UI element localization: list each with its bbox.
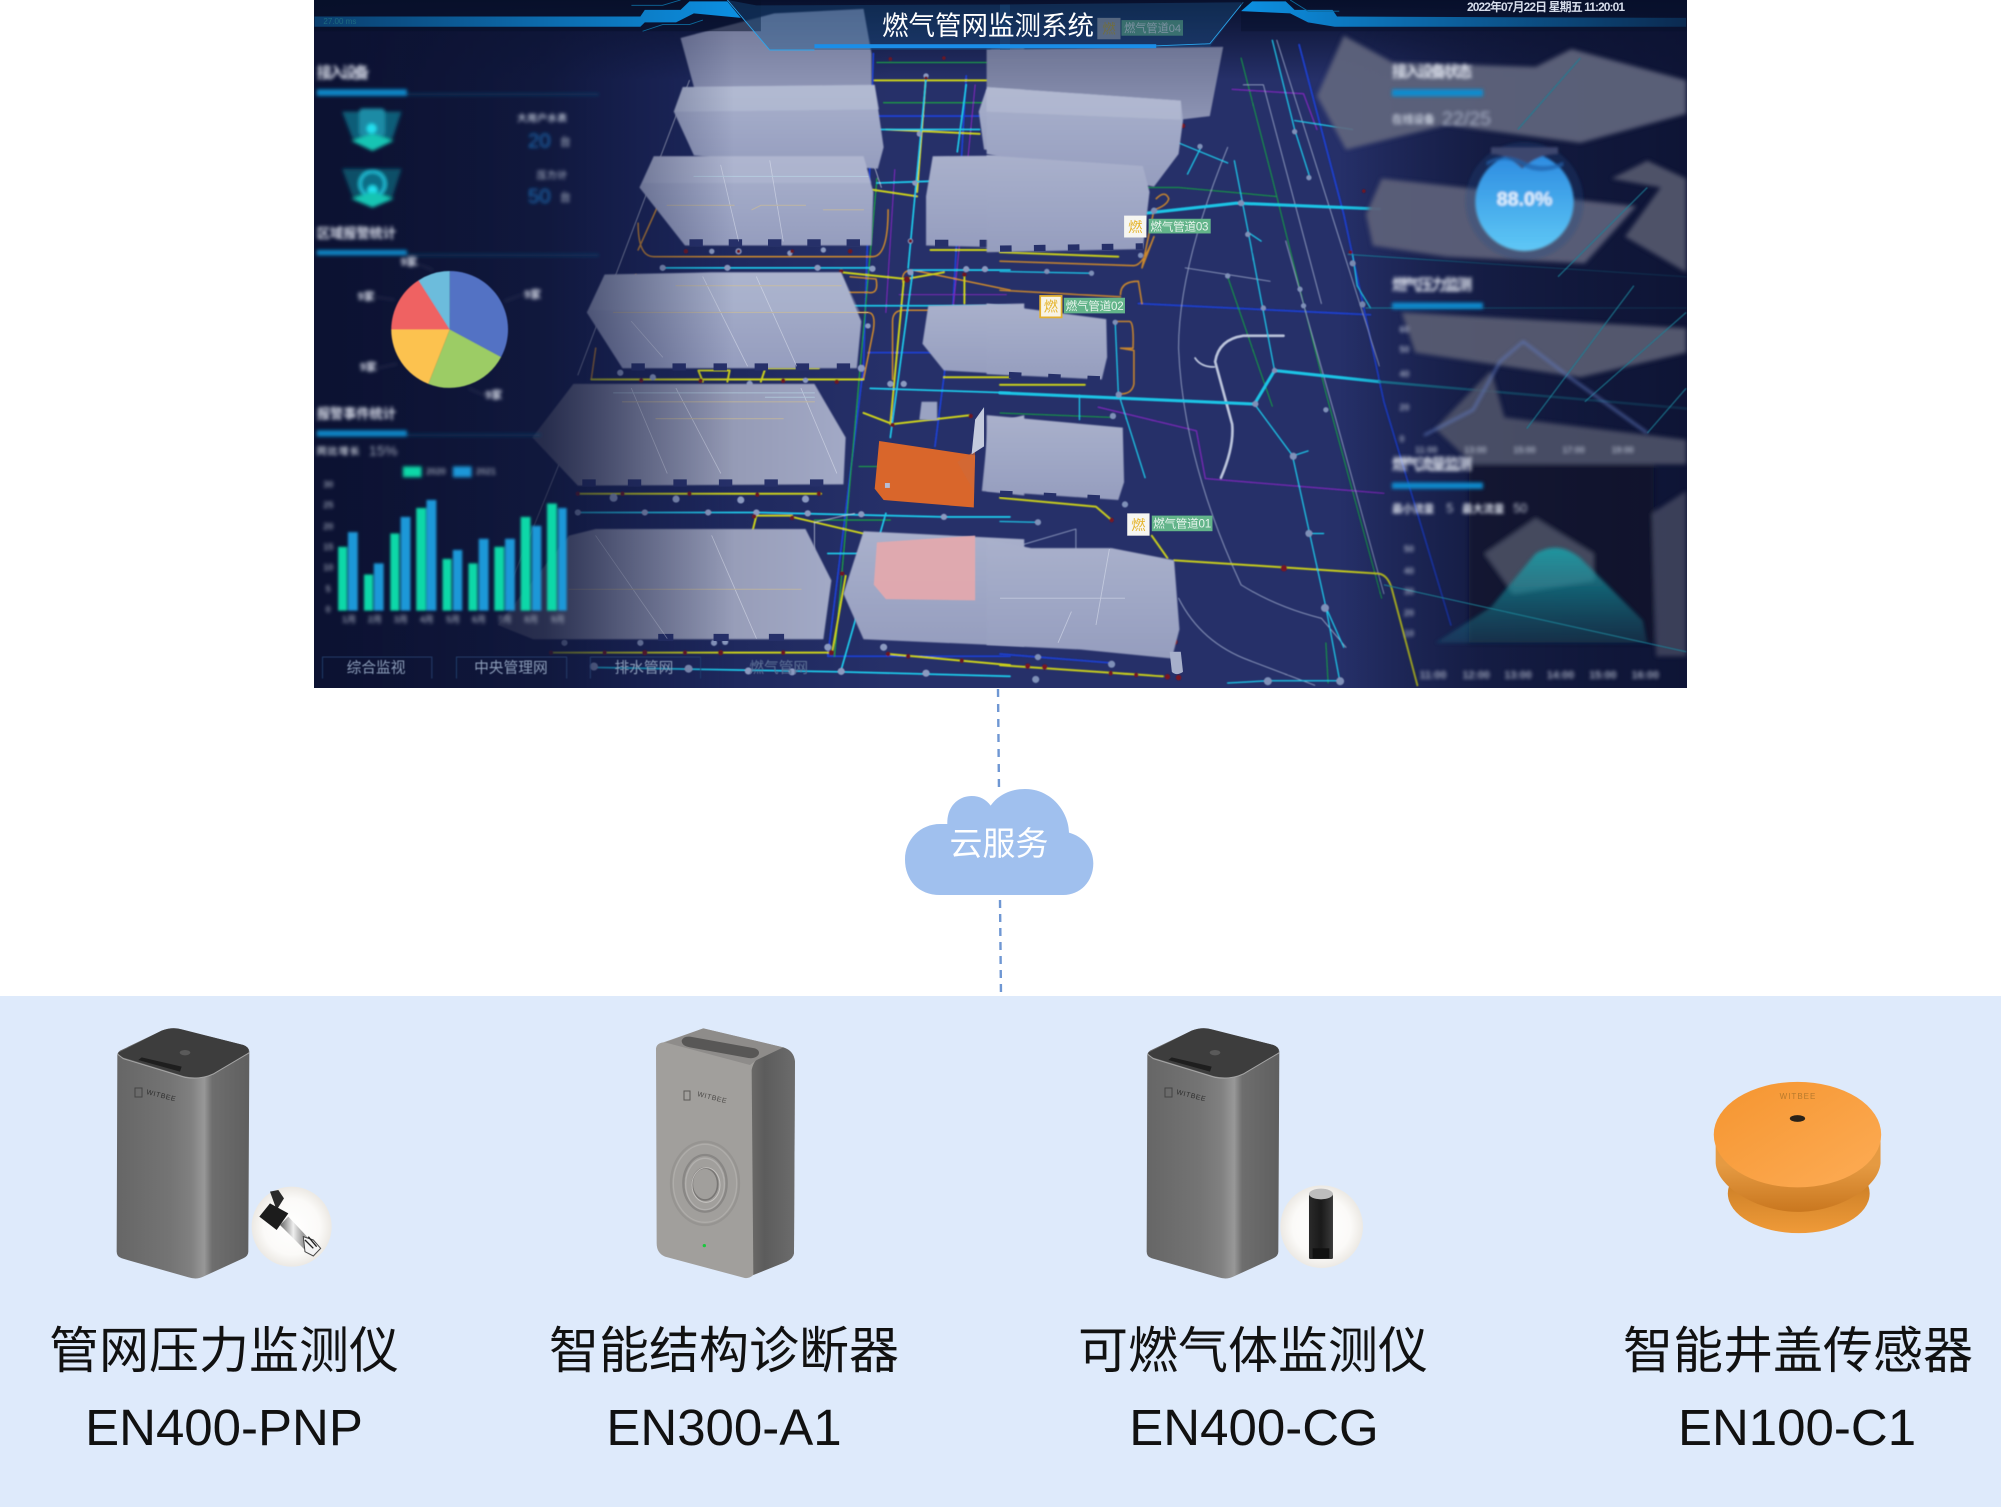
- stat: pressure: 压力计: [537, 169, 567, 182]
- pie labels: 9家: [358, 290, 375, 303]
- pipeline label 03: [1124, 216, 1211, 237]
- building blocks: [497, 9, 1223, 674]
- device: smart structure diagnostic unit: WITBEE: [697, 1091, 728, 1105]
- cloud service: [905, 789, 1093, 895]
- bar chart legend and axes: 15: [323, 542, 333, 552]
- bar chart legend and axes: 2月: [368, 614, 382, 624]
- pipeline label 04: 燃气管道04: [1124, 21, 1181, 35]
- device label: gas monitor: 可燃气体监测仪: [1078, 1311, 1428, 1383]
- bar chart legend and axes: 30: [323, 479, 333, 489]
- panel: right blurred monitoring charts: 16:00: [1632, 670, 1659, 682]
- bar chart legend and axes: 3月: [394, 614, 408, 624]
- bar chart legend and axes: 7月: [498, 614, 512, 624]
- bar chart legend and axes: [323, 466, 565, 624]
- pipeline label 04: 燃: [1102, 20, 1116, 36]
- stat: device count: 20: [528, 129, 551, 152]
- bottom navigation tabs: [322, 657, 808, 679]
- pie labels: 9家: [401, 256, 418, 269]
- device: smart manhole cover sensor: [1714, 1082, 1881, 1233]
- panel: right blurred monitoring charts: 20: [1400, 403, 1409, 413]
- panel: right blurred monitoring charts: 22/25: [1442, 108, 1491, 130]
- device label: gas monitor: EN400-CG: [1129, 1399, 1379, 1456]
- stat: device count: [517, 111, 571, 152]
- bottom navigation tabs: 综合监视: [347, 660, 406, 677]
- pipeline label 02: 燃气管道02: [1066, 299, 1124, 313]
- pie labels: 9家: [524, 288, 541, 301]
- stat: pressure: [528, 169, 571, 208]
- pipeline label 01: [1127, 513, 1212, 536]
- bar chart legend and axes: 5: [326, 584, 331, 594]
- panel: left blurred monitoring charts: 15%: [369, 443, 398, 459]
- panel: right blurred monitoring charts: 10: [1404, 629, 1414, 639]
- header bar: 27.00 ms: [323, 17, 356, 26]
- stat: pressure: 50: [528, 185, 551, 208]
- device label: gas monitor: [1078, 1311, 1428, 1456]
- panel: right blurred monitoring charts: 40: [1404, 566, 1414, 576]
- stat: device count: 大用户水表: [517, 111, 567, 124]
- pipe network map: [506, 40, 1686, 685]
- bar chart legend and axes: 1月: [342, 614, 356, 624]
- device label: structure diagnostic unit: 智能结构诊断器: [549, 1311, 899, 1383]
- bar chart legend and axes: 2021: [476, 467, 496, 477]
- device label: manhole sensor: 智能井盖传感器: [1623, 1311, 1973, 1383]
- panel: right blurred monitoring charts: 19:00: [1612, 445, 1634, 455]
- pipeline label 02: [1040, 296, 1125, 317]
- device: smart manhole cover sensor: WITBEE: [1780, 1092, 1816, 1101]
- panel: right blurred monitoring charts: 15:00: [1513, 445, 1536, 455]
- logo mark: [135, 1088, 142, 1097]
- bar chart legend and axes: 6月: [472, 614, 486, 624]
- device label: pressure monitor: EN400-PNP: [85, 1399, 363, 1456]
- heading: alarm event statistics: 报警事件统计: [317, 406, 396, 422]
- panel: right blurred monitoring charts: 14:00: [1547, 670, 1574, 682]
- pie chart: [391, 271, 508, 388]
- bottom navigation tabs: 排水管网: [614, 660, 673, 677]
- heading: connected devices: 接入设备: [317, 64, 369, 82]
- panel: right blurred monitoring charts: 15:00: [1589, 670, 1617, 682]
- panel: right blurred monitoring charts: 50: [1404, 544, 1414, 554]
- dashboard title: 燃气管网监测系统: [882, 4, 1094, 43]
- bar chart legend and axes: 20: [323, 521, 333, 531]
- panel: right blurred monitoring charts: 20: [1404, 608, 1414, 618]
- heading: device status: 接入设备状态: [1392, 63, 1472, 81]
- pie labels: 9家: [485, 389, 502, 402]
- bottom navigation tabs: 燃气管网: [749, 659, 808, 677]
- device label: structure diagnostic unit: [549, 1311, 899, 1456]
- heading: pipe pressure: 燃气压力监测: [1392, 276, 1472, 294]
- panel: right blurred monitoring charts: 40: [1400, 369, 1409, 379]
- panel: right blurred monitoring charts: 最大流量: [1462, 502, 1505, 515]
- panel: right blurred monitoring charts: 50: [1400, 345, 1409, 355]
- device label: manhole sensor: EN100-C1: [1678, 1399, 1916, 1456]
- bar chart legend and axes: 10: [323, 562, 333, 572]
- device label: manhole sensor: [1623, 1311, 1973, 1456]
- panel: left blurred monitoring charts: [317, 64, 808, 679]
- map pipeline labels: [1040, 216, 1212, 536]
- device: smart structure diagnostic unit: [656, 1028, 795, 1278]
- panel: right blurred monitoring charts: 在线设备: [1392, 113, 1435, 126]
- panel: right blurred monitoring charts: 30: [1404, 587, 1414, 597]
- panel: right blurred monitoring charts: 11:00: [1420, 670, 1446, 682]
- pie labels: 9家: [360, 361, 377, 374]
- panel: right blurred monitoring charts: 17:00: [1562, 445, 1585, 455]
- bar chart legend and axes: 25: [323, 500, 333, 510]
- panel: right blurred monitoring charts: 0: [1400, 434, 1405, 444]
- bar chart legend and axes: 5月: [446, 614, 460, 624]
- pipeline label 04: [1097, 18, 1183, 39]
- bar chart legend and axes: 9月: [551, 614, 565, 624]
- right panel shade: [1340, 30, 1687, 688]
- connector: cloud to devices: [1000, 900, 1001, 996]
- pipeline label 02: 燃: [1044, 298, 1058, 316]
- pipeline label 03: 燃气管道03: [1150, 219, 1208, 233]
- pipeline label 01: 燃气管道01: [1153, 517, 1211, 531]
- panel: right blurred monitoring charts: 50: [1513, 501, 1527, 515]
- heading: flow data: 燃气流量监测: [1392, 456, 1472, 474]
- device label: pressure monitor: [49, 1311, 399, 1456]
- pipeline label 01: 燃: [1131, 516, 1146, 534]
- pipeline label 03: 燃: [1128, 218, 1142, 236]
- gauge value: 88.0%: [1497, 188, 1552, 210]
- icon: lock shield: [342, 169, 402, 208]
- bottom navigation tabs: 中央管理网: [474, 660, 548, 677]
- device label: structure diagnostic unit: EN300-A1: [606, 1399, 842, 1456]
- panel: right blurred monitoring charts: 12:00: [1462, 670, 1490, 682]
- bar chart legend and axes: 8月: [524, 614, 538, 624]
- device: pipe network pressure monitor: [117, 1028, 332, 1278]
- panel: right blurred monitoring charts: [1317, 36, 1686, 682]
- heading: regional alarm statistics: 区域报警统计: [317, 225, 396, 241]
- device: combustible gas monitor: WITBEE: [1176, 1089, 1207, 1103]
- panel: right blurred monitoring charts: 13:00: [1504, 670, 1532, 682]
- roof highlights: [674, 85, 879, 112]
- stat: device count: 台: [560, 136, 571, 149]
- icon: device shield: [342, 108, 402, 151]
- bar chart legend and axes: 4月: [420, 614, 434, 624]
- connector: dashboard to cloud: [998, 689, 999, 792]
- device: pipe network pressure monitor: WITBEE: [146, 1089, 177, 1103]
- panel: right blurred monitoring charts: 13:00: [1464, 445, 1487, 455]
- device label: pressure monitor: 管网压力监测仪: [49, 1311, 399, 1383]
- bar chart legend and axes: 2020: [426, 467, 446, 477]
- left panel shade: [402, 32, 724, 688]
- bar chart: [338, 500, 567, 611]
- pie labels: [358, 256, 541, 402]
- bar chart legend and axes: 0: [326, 604, 331, 614]
- panel: right blurred monitoring charts: 最小流量: [1392, 502, 1435, 515]
- panel: gas network monitoring dashboard: [314, 0, 1687, 688]
- cloud service: 云服务: [950, 817, 1048, 865]
- device: combustible gas monitor: [1147, 1028, 1363, 1278]
- panel: device band: [0, 996, 2001, 1507]
- panel: right blurred monitoring charts: 5: [1446, 501, 1453, 515]
- stat: pressure: 台: [560, 191, 571, 204]
- panel: right blurred monitoring charts: 11:00: [1415, 445, 1438, 455]
- panel: left blurred monitoring charts: 同比增长: [317, 444, 360, 457]
- panel: right blurred monitoring charts: 60: [1400, 325, 1409, 335]
- date and time: 2022年07月22日 星期五 11:20:01: [1467, 0, 1625, 14]
- header bar: [314, 0, 1687, 50]
